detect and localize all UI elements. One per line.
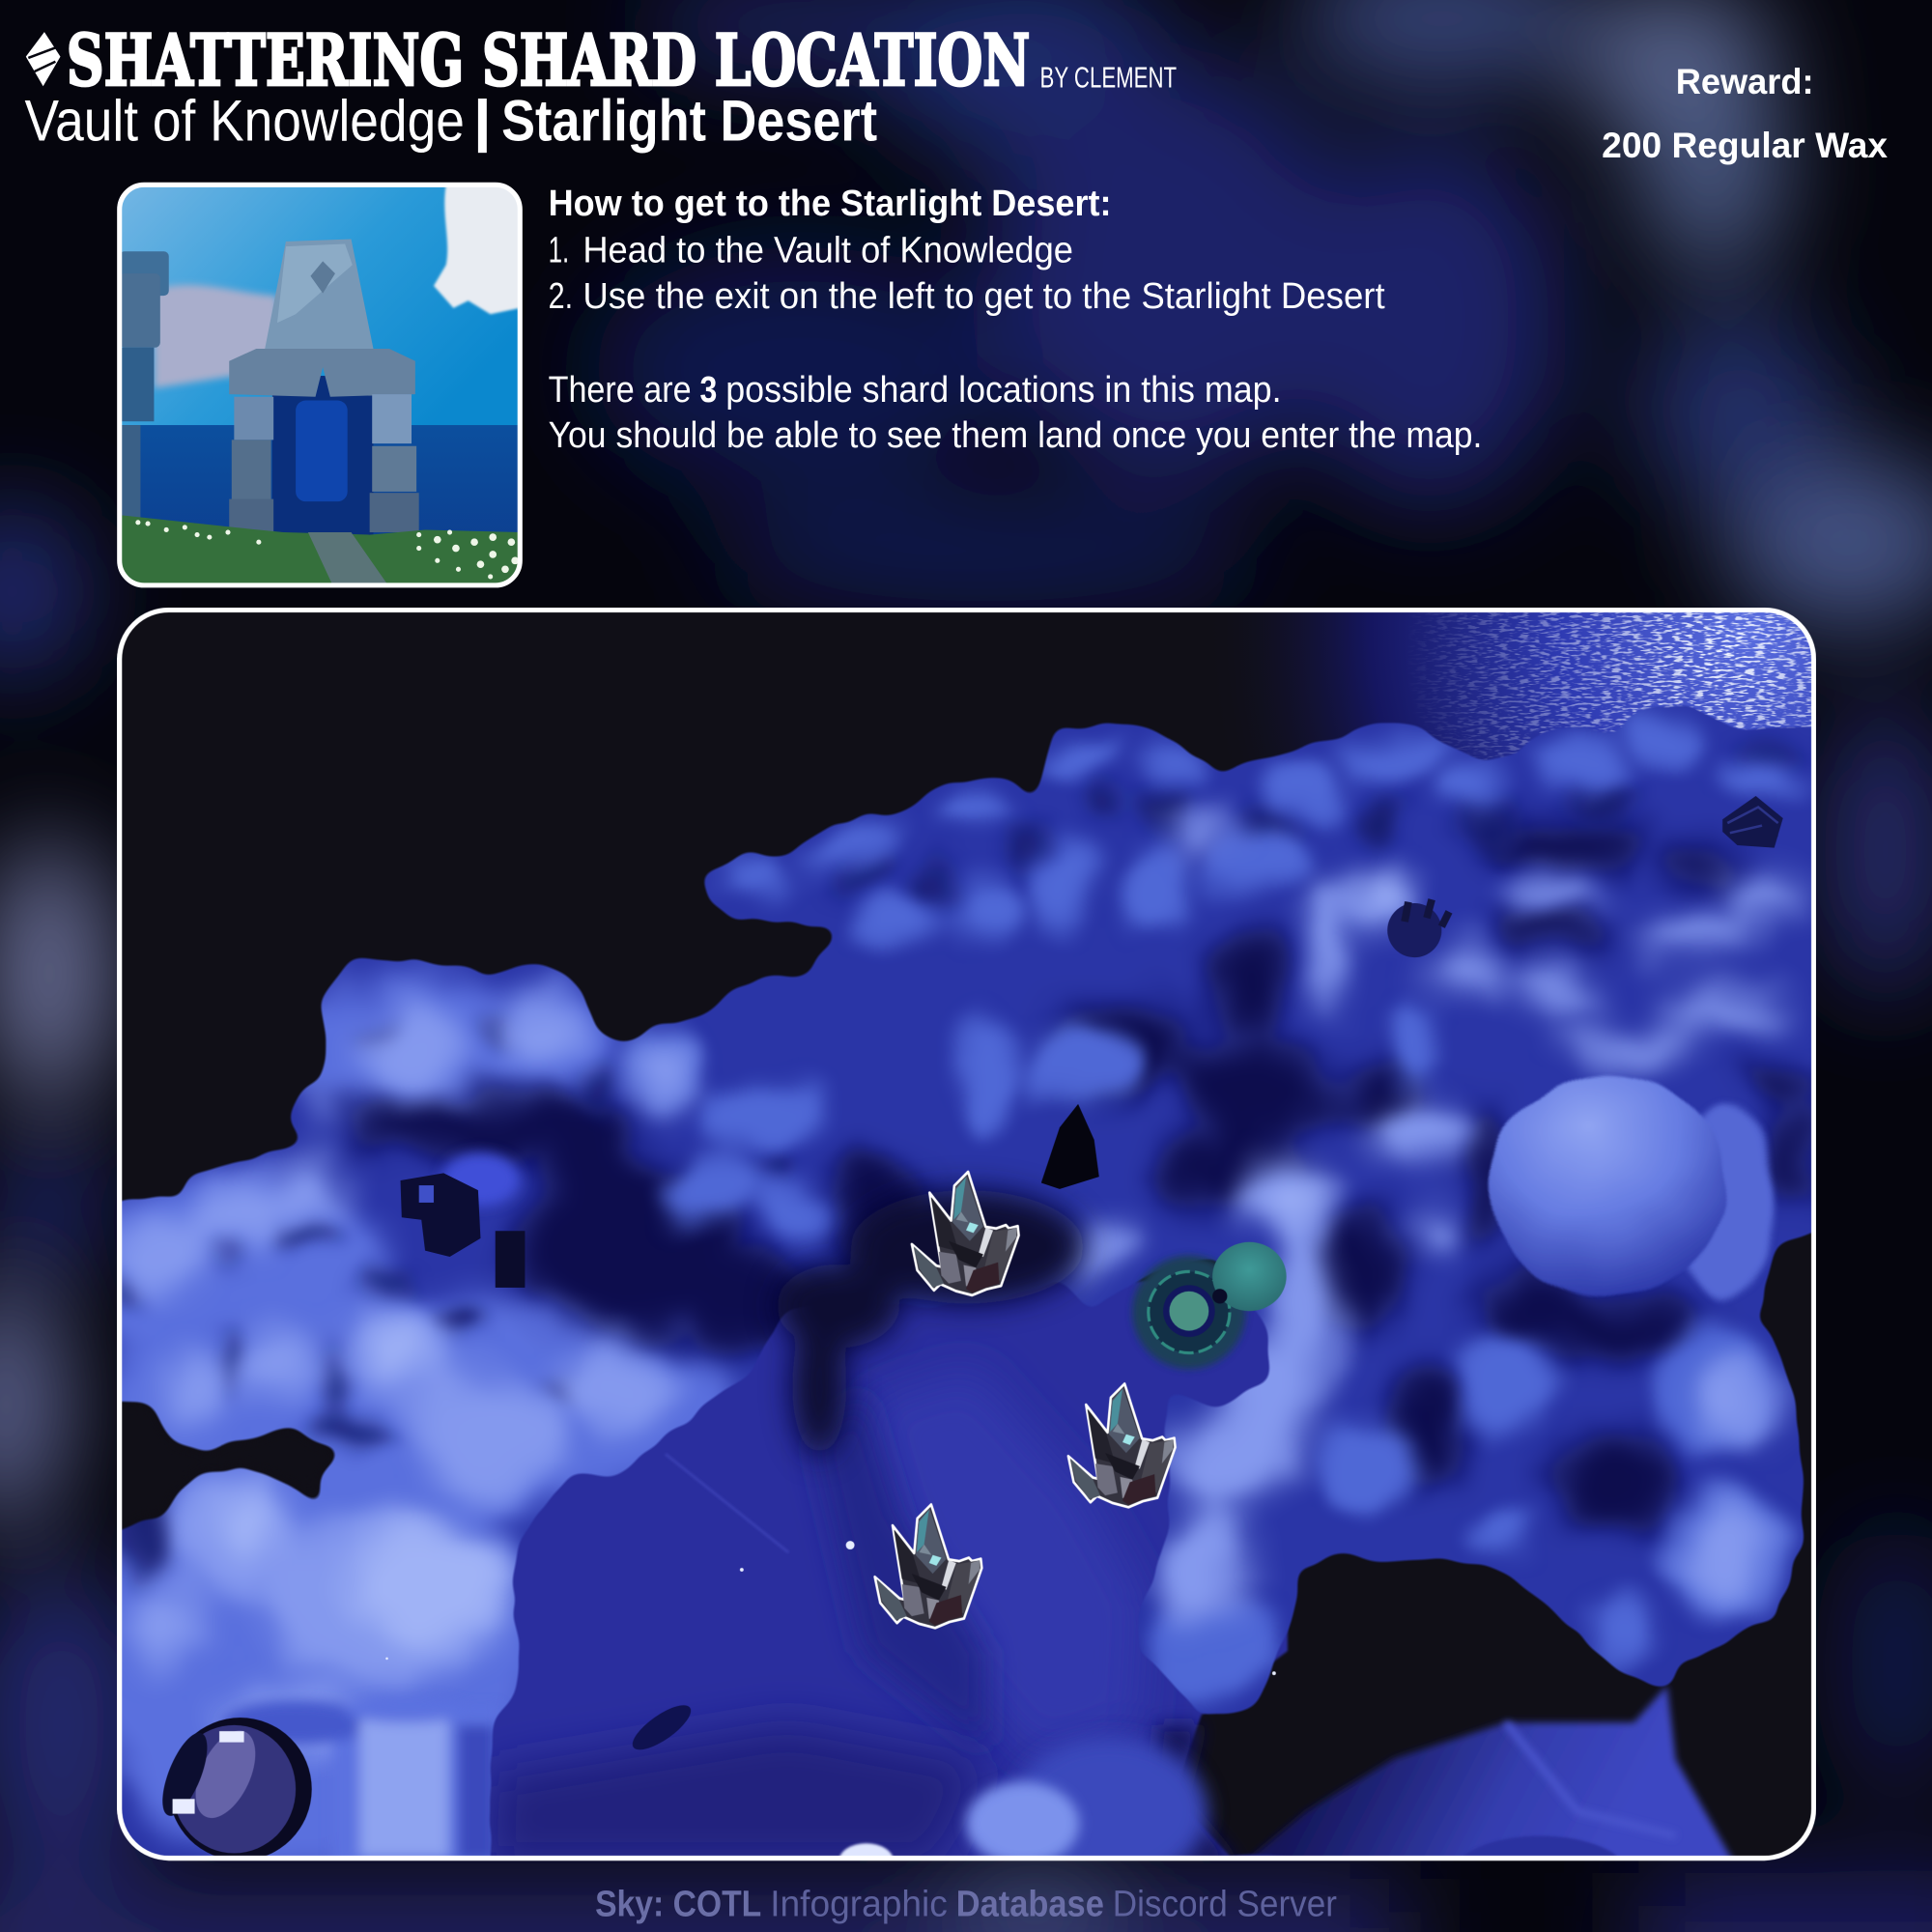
text block: directions bbox=[549, 183, 1482, 456]
ground bbox=[469, 1282, 1736, 1910]
subtitle: Vault of Knowledge bbox=[25, 88, 465, 153]
crystal marker 2 bbox=[1068, 1383, 1176, 1507]
subtitle bbox=[25, 88, 877, 153]
footer: Discord Server bbox=[1113, 1883, 1337, 1924]
title bbox=[26, 20, 1030, 102]
clouds bbox=[122, 705, 1812, 1857]
title text: SHATTERING SHARD LOCATION bbox=[67, 20, 1030, 102]
reward: 200 Regular Wax bbox=[1602, 126, 1889, 165]
crystal marker 1 bbox=[912, 1172, 1019, 1295]
dark area under crystal bbox=[777, 1190, 1084, 1455]
reward: Reward: bbox=[1676, 62, 1814, 101]
deep shadows bbox=[339, 823, 1812, 1530]
shard count: 3 bbox=[699, 369, 717, 411]
dark ruin left bbox=[401, 1152, 525, 1288]
small floating rock bbox=[626, 1697, 697, 1757]
step 1: Head to the Vault of Knowledge bbox=[582, 230, 1073, 271]
credit: BY CLEMENT bbox=[1040, 62, 1177, 95]
black gap between clouds bbox=[74, 1396, 339, 1540]
teal shrine bbox=[1132, 1242, 1287, 1369]
icon: diamond shard bbox=[26, 32, 61, 86]
step 2: 2. bbox=[549, 275, 573, 317]
panel: map bbox=[117, 608, 1816, 1861]
footer: Sky: COTL bbox=[595, 1883, 761, 1924]
reward bbox=[1602, 62, 1889, 165]
top highlights bbox=[214, 870, 1397, 1637]
water sparkle bbox=[1258, 612, 1812, 761]
shard count: There are bbox=[549, 369, 692, 411]
crease shadows bbox=[101, 742, 1804, 1577]
subtitle: Starlight Desert bbox=[501, 88, 877, 153]
directions heading: How to get to the Starlight Desert: bbox=[549, 183, 1112, 224]
note: You should be able to see them land once you enter the map. bbox=[549, 414, 1482, 456]
large puff cloud bbox=[1490, 1074, 1775, 1300]
ship wreck bottom left bbox=[154, 1718, 312, 1861]
shard count: possible shard locations in this map. bbox=[725, 369, 1282, 411]
step 2: Use the exit on the left to get to the Starlight Desert bbox=[582, 275, 1385, 317]
medium light patches bbox=[623, 717, 1804, 1700]
bright patches bbox=[111, 810, 1806, 1762]
panel: thumbnail of gate bbox=[120, 185, 520, 585]
footer: Infographic bbox=[770, 1883, 948, 1924]
step 1: 1. bbox=[549, 230, 569, 271]
footer bbox=[595, 1883, 1337, 1924]
small glowing dots bbox=[385, 1541, 1276, 1675]
footer: Database bbox=[956, 1883, 1104, 1924]
bottom left pillar bbox=[222, 1698, 499, 1866]
left pillars bbox=[120, 251, 169, 518]
small rock island top right bbox=[1722, 796, 1783, 848]
bottom clouds bbox=[839, 1737, 1208, 1886]
map border bbox=[120, 610, 1814, 1858]
grass bbox=[120, 515, 520, 585]
gate bbox=[229, 239, 419, 536]
dark pillar shapes bbox=[1041, 1104, 1099, 1189]
left cloud base bbox=[74, 971, 739, 1873]
small round ruin bbox=[1387, 899, 1449, 957]
crystal marker 3 bbox=[875, 1504, 981, 1628]
